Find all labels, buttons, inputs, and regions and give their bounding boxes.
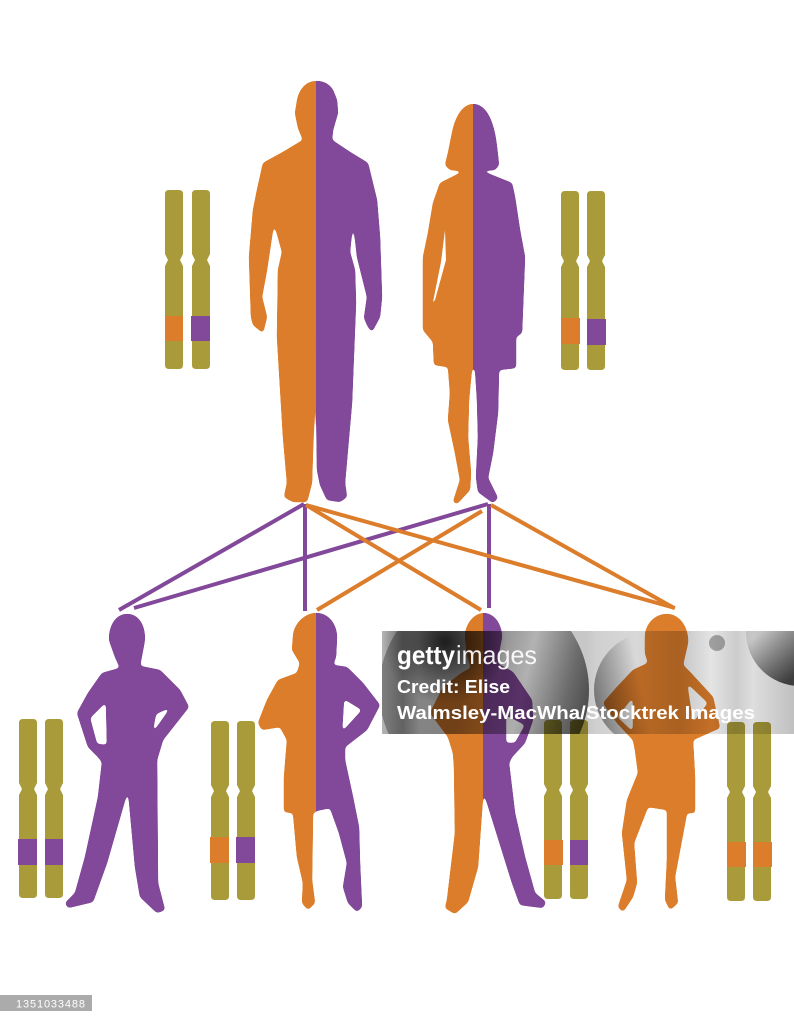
man parent figure	[249, 81, 382, 502]
credit line 2: Walmsley-MacWha/Stocktrek Images	[397, 703, 755, 723]
getty images logo: getty	[397, 640, 455, 670]
chromosomes: woman	[561, 191, 606, 370]
child 2 figure	[258, 613, 380, 912]
chromosomes: child 2	[210, 721, 255, 900]
child 3 orange half	[431, 613, 483, 914]
inheritance lines	[119, 504, 675, 611]
man orange half	[248, 80, 316, 502]
credit line 1: Credit: Elise	[397, 677, 510, 697]
chromosomes: child 4	[727, 722, 772, 901]
image id tag	[0, 995, 92, 1011]
watermark banner	[382, 631, 794, 734]
woman arm gap	[433, 230, 446, 302]
child 2 orange half	[258, 612, 316, 909]
man purple half	[316, 80, 382, 502]
image id tag: 1351033488	[16, 998, 85, 1010]
watermark background	[382, 631, 794, 734]
woman orange half	[422, 104, 473, 504]
woman parent figure	[423, 104, 525, 504]
chromosomes: child 3	[544, 720, 588, 899]
chromosomes: man	[165, 190, 210, 369]
woman purple half	[473, 104, 526, 502]
child 1 figure, purple	[65, 614, 189, 913]
child 3 purple half	[483, 613, 546, 908]
chromosomes: child 1	[18, 719, 63, 898]
child 2 purple half	[316, 612, 380, 911]
child 4 figure, orange	[603, 614, 720, 912]
getty images logo, light part: images	[456, 640, 537, 670]
child 3 figure	[430, 613, 546, 914]
